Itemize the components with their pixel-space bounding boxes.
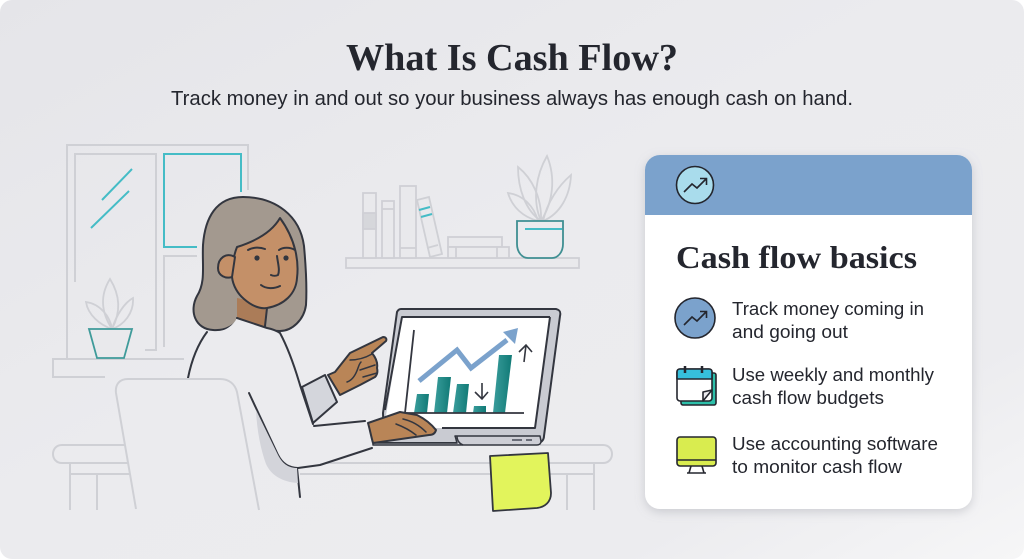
woman [188,197,386,497]
sleeve shadow [256,410,298,483]
item text 1: and going out [732,322,848,342]
hair [194,197,306,331]
bars [414,394,429,413]
icon: trend [675,298,715,338]
eyes [254,255,260,261]
ear [218,255,235,278]
item text 3: Use accounting software [732,434,938,454]
shelf with books [346,186,579,268]
card heading: Cash flow basics [676,239,917,275]
neck [237,298,268,327]
icon: calendar [677,366,716,405]
laptop lid [383,309,560,443]
icon: monitor [677,437,716,473]
laptop [373,309,560,445]
cuff [302,375,337,423]
item text 2: cash flow budgets [732,388,884,408]
laptop screen [384,317,550,428]
item text 1: Track money coming in [732,299,924,319]
chair [116,379,259,510]
panel: cash flow basics [645,155,972,509]
sticky note [490,453,551,511]
brows, nose, mouth [248,248,295,288]
window [67,145,248,358]
small plant [86,279,133,358]
window sill [53,359,184,377]
item text 3: to monitor cash flow [732,457,903,477]
axes [405,330,524,413]
typing hand [368,412,436,443]
desk [53,445,612,510]
laptop base [373,436,541,445]
shirt body [188,318,372,468]
pointing hand [328,337,386,395]
down arrow [475,383,488,399]
face [232,218,298,308]
chart on laptop screen [405,328,532,413]
title: What Is Cash Flow? [346,37,678,79]
trend arrow [419,340,507,381]
subtitle: Track money in and out so your business always has enough cash on hand. [171,88,853,110]
shelf plant [508,156,571,258]
card header [645,155,972,215]
up arrow [519,345,532,362]
item text 2: Use weekly and monthly [732,365,934,385]
icon: header trend [676,166,714,204]
